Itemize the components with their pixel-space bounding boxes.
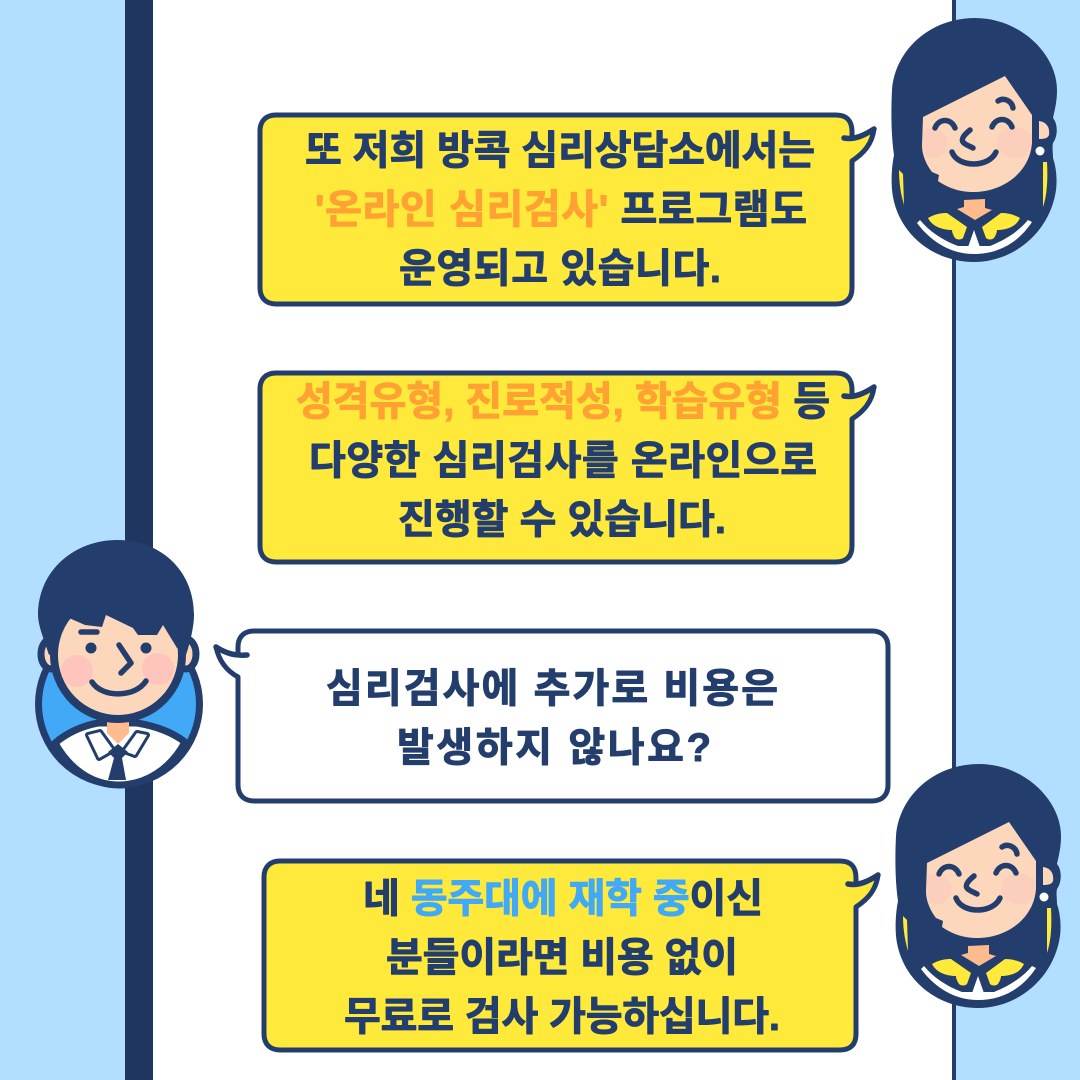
character: woman counsellor bottom — [895, 764, 1061, 1008]
background: right panel edge line — [952, 0, 956, 1080]
character: man student — [38, 540, 200, 785]
bubble 4 text — [344, 877, 780, 1039]
character: woman counsellor top — [891, 18, 1057, 262]
bubble 4 text: 무료로 검사 가능하십니다. — [344, 995, 780, 1039]
bubble 4 text: 분들이라면 비용 없이 — [386, 936, 738, 980]
bubble 1 text: 운영되고 있습니다. — [399, 247, 721, 291]
bubble 2 text: 성격유형, 진로적성, 학습유형 등 — [296, 380, 830, 424]
speech bubble 3 — [216, 631, 888, 801]
speech bubble 1 — [260, 115, 874, 304]
bubble 1 text: 또 저희 방콕 심리상담소에서는 — [305, 129, 815, 173]
bubble 2 text: 진행할 수 있습니다. — [398, 498, 726, 542]
speech bubble 2 — [260, 373, 874, 562]
background: right light blue panel — [952, 0, 1080, 1080]
bubble 3 text — [326, 667, 778, 770]
bubble 1 text — [305, 129, 815, 291]
bubble 2 text — [296, 380, 830, 542]
speech bubble 4 — [264, 861, 878, 1050]
background: dark navy vertical bar — [125, 0, 153, 1080]
background: left light blue panel — [0, 0, 125, 1080]
bubble 3 text: 발생하지 않나요? — [397, 726, 711, 770]
bubble 3 text: 심리검사에 추가로 비용은 — [326, 667, 778, 711]
bubble 4 text: 네 동주대에 재학 중이신 — [363, 877, 763, 921]
bubble 1 text: '온라인 심리검사' 프로그램도 — [315, 188, 807, 232]
bubble 2 text: 다양한 심리검사를 온라인으로 — [309, 439, 817, 483]
